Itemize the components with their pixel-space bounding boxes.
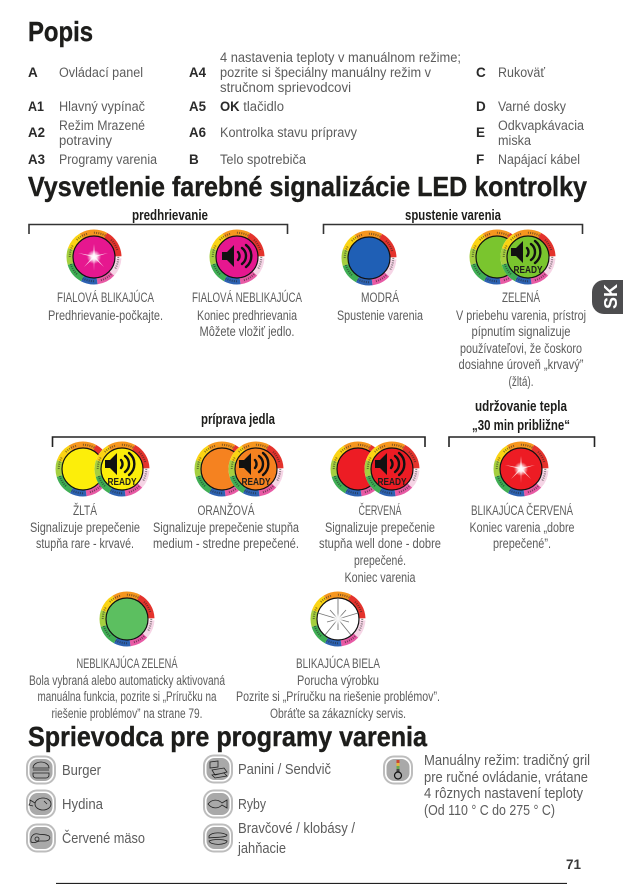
icon: panini (204, 756, 232, 782)
caption: red flashing: Koniec varenia „dobre (470, 520, 574, 535)
parts legend table: stručnom sprievodcovi (220, 80, 351, 95)
LED: yellow with ready (56, 442, 150, 496)
caption: red: prepečené. (354, 553, 406, 568)
page number: 71 (566, 857, 582, 872)
group label: príprava jedla bracket: príprava jedla (201, 412, 276, 428)
caption: orange: ORANŽOVÁ (198, 503, 254, 518)
parts legend table: Rukoväť (498, 65, 546, 80)
group label: udržovanie tepla bracket: „30 min približne“ (472, 418, 570, 434)
label: Burger: Burger (62, 763, 101, 779)
caption: orange (153, 503, 299, 551)
caption: green: dosiahne úroveň „krvavý” (458, 357, 584, 372)
parts legend table: C (476, 65, 486, 80)
caption: orange: medium - stredne prepečené. (153, 536, 299, 551)
caption: green steady: manuálna funkcia, pozrite si „Príručku na (38, 689, 217, 704)
label: Červené mäso: Červené mäso (62, 830, 145, 847)
group label: spustenie varenia bracket: spustenie varenia (405, 208, 502, 224)
LED: red with ready: READY (378, 477, 407, 488)
caption: white flashing: Obráťte sa zákaznícky servis. (270, 706, 406, 721)
title: Popis: Popis (28, 16, 93, 47)
caption: red: stupňa well done - dobre (319, 536, 441, 551)
heading: cooking programs guide: Sprievodca pre programy varenia (28, 721, 427, 752)
icon: poultry (27, 790, 55, 818)
LED: red flashing (494, 442, 548, 496)
icon: red meat (27, 824, 55, 852)
parts legend table: potraviny (59, 133, 112, 148)
caption: purple steady: Môžete vložiť jedlo. (200, 324, 294, 339)
LED: orange with ready (194, 442, 284, 496)
text: manual mode description: (Od 110 ° C do 275 ° C) (424, 803, 555, 819)
group label: udržovanie tepla bracket (449, 399, 594, 447)
caption: white flashing: Porucha výrobku (297, 673, 379, 688)
label: Panini / Sendvič: Panini / Sendvič (238, 762, 331, 778)
parts legend table: pozrite si špeciálny manuálny režim v (220, 65, 431, 80)
label: pork / sausages / lamb: Bravčové / klobásy / (238, 821, 356, 837)
text: manual mode description (424, 753, 590, 819)
LED: purple steady with sound (210, 230, 264, 284)
label: pork / sausages / lamb (237, 821, 356, 857)
caption: purple steady: FIALOVÁ NEBLIKAJÚCA (192, 290, 302, 305)
group label: spustenie varenia bracket (324, 208, 582, 234)
LED: blue (342, 230, 396, 286)
parts legend table: Varné dosky (498, 99, 566, 114)
label: Hydina: Hydina (62, 797, 104, 813)
parts legend table (28, 50, 584, 167)
group label: predhrievanie bracket: predhrievanie (132, 208, 208, 224)
parts legend table: A2 (28, 125, 45, 140)
parts legend table: Kontrolka stavu prípravy (220, 125, 357, 140)
parts legend table: Ovládací panel (59, 65, 143, 80)
caption: red: Signalizuje prepečenie (325, 520, 435, 535)
caption: blue: Spustenie varenia (337, 308, 423, 323)
LED: green steady (100, 592, 154, 646)
caption: yellow: ŽLTÁ (73, 503, 97, 518)
tab: SK language marker (592, 280, 623, 314)
caption: orange: Signalizuje prepečenie stupňa (153, 520, 299, 535)
parts legend table: Režim Mrazené (59, 118, 145, 133)
LED: purple flashing (66, 230, 122, 284)
icon: pork and sausage (204, 824, 232, 852)
caption: red (319, 503, 441, 585)
caption: green steady: NEBLIKAJÚCA ZELENÁ (76, 656, 178, 671)
caption: purple steady: Koniec predhrievania (197, 308, 297, 323)
caption: green (456, 290, 586, 389)
caption: red flashing (470, 503, 574, 551)
caption: purple steady (192, 290, 302, 339)
group label: udržovanie tepla bracket: udržovanie tepla (475, 399, 568, 415)
tab: SK language marker: SK (601, 284, 621, 309)
parts legend table: A6 (189, 125, 206, 140)
parts legend table: OK tlačidlo (220, 99, 284, 114)
LED: white flashing (310, 592, 366, 646)
caption: green steady: riešenie problémov” na strane 79. (52, 706, 202, 721)
caption: green: používateľovi, že čoskoro (460, 341, 582, 356)
caption: green steady: Bola vybraná alebo automaticky aktivovaná (29, 673, 225, 688)
parts legend table: miska (498, 133, 531, 148)
text: manual mode description: 4 rôznych nastavení teploty (424, 786, 584, 802)
LED: yellow with ready: READY (108, 477, 137, 488)
caption: yellow (30, 503, 140, 551)
parts legend table: 4 nastavenia teploty v manuálnom režime; (220, 50, 461, 65)
caption: yellow: Signalizuje prepečenie (30, 520, 140, 535)
caption: red flashing: BLIKAJÚCA ČERVENÁ (471, 503, 573, 518)
caption: yellow: stupňa rare - krvavé. (36, 536, 134, 551)
parts legend table: A1 (28, 99, 44, 114)
caption: red flashing: prepečené”. (493, 536, 551, 551)
caption: white flashing: Pozrite si „Príručku na riešenie problémov”. (236, 689, 440, 704)
parts legend table: B (189, 152, 199, 167)
caption: red: Koniec varenia (344, 570, 416, 585)
parts legend table: A (28, 65, 38, 80)
icon: burger (27, 756, 55, 784)
parts legend table: Napájací kábel (498, 152, 580, 167)
LED: red with ready (330, 442, 420, 496)
LED: green with ready: READY (514, 265, 543, 276)
parts legend table: A5 (189, 99, 206, 114)
group label: predhrievanie bracket (29, 208, 288, 234)
LED: orange with ready: READY (242, 477, 271, 488)
caption: purple flashing (48, 290, 163, 323)
caption: green: V priebehu varenia, prístroj (456, 308, 586, 323)
parts legend table: F (476, 152, 484, 167)
parts legend table: A4 (189, 65, 206, 80)
LED: green with ready (470, 230, 556, 284)
text: manual mode description: Manuálny režim: tradičný gril (424, 753, 590, 769)
caption: purple flashing: Predhrievanie-počkajte. (48, 308, 163, 323)
caption: white flashing (236, 656, 440, 721)
caption: red: ČERVENÁ (358, 503, 402, 518)
icon: fish (204, 790, 232, 818)
parts legend table: Odkvapkávacia (498, 118, 584, 133)
parts legend table: E (476, 125, 485, 140)
parts legend table: Telo spotrebiča (220, 152, 306, 167)
caption: blue (337, 290, 423, 323)
parts legend table: D (476, 99, 486, 114)
parts legend table: A3 (28, 152, 45, 167)
caption: green: ZELENÁ (502, 290, 540, 305)
caption: green steady (29, 656, 225, 721)
caption: blue: MODRÁ (361, 290, 399, 305)
group label: príprava jedla bracket (52, 412, 425, 447)
label: pork / sausages / lamb: jahňacie (237, 841, 286, 857)
caption: white flashing: BLIKAJÚCA BIELA (296, 656, 380, 671)
caption: green: (žltá). (508, 374, 534, 389)
parts legend table: Programy varenia (59, 152, 157, 167)
text: manual mode description: pre ručné ovládanie, vrátane (424, 770, 588, 786)
parts legend table: Hlavný vypínač (59, 99, 145, 114)
caption: green: pípnutím signalizuje (472, 324, 570, 339)
icon: manual thermometer (384, 756, 412, 784)
caption: purple flashing: FIALOVÁ BLIKAJÚCA (57, 290, 154, 305)
label: Ryby: Ryby (238, 797, 267, 813)
